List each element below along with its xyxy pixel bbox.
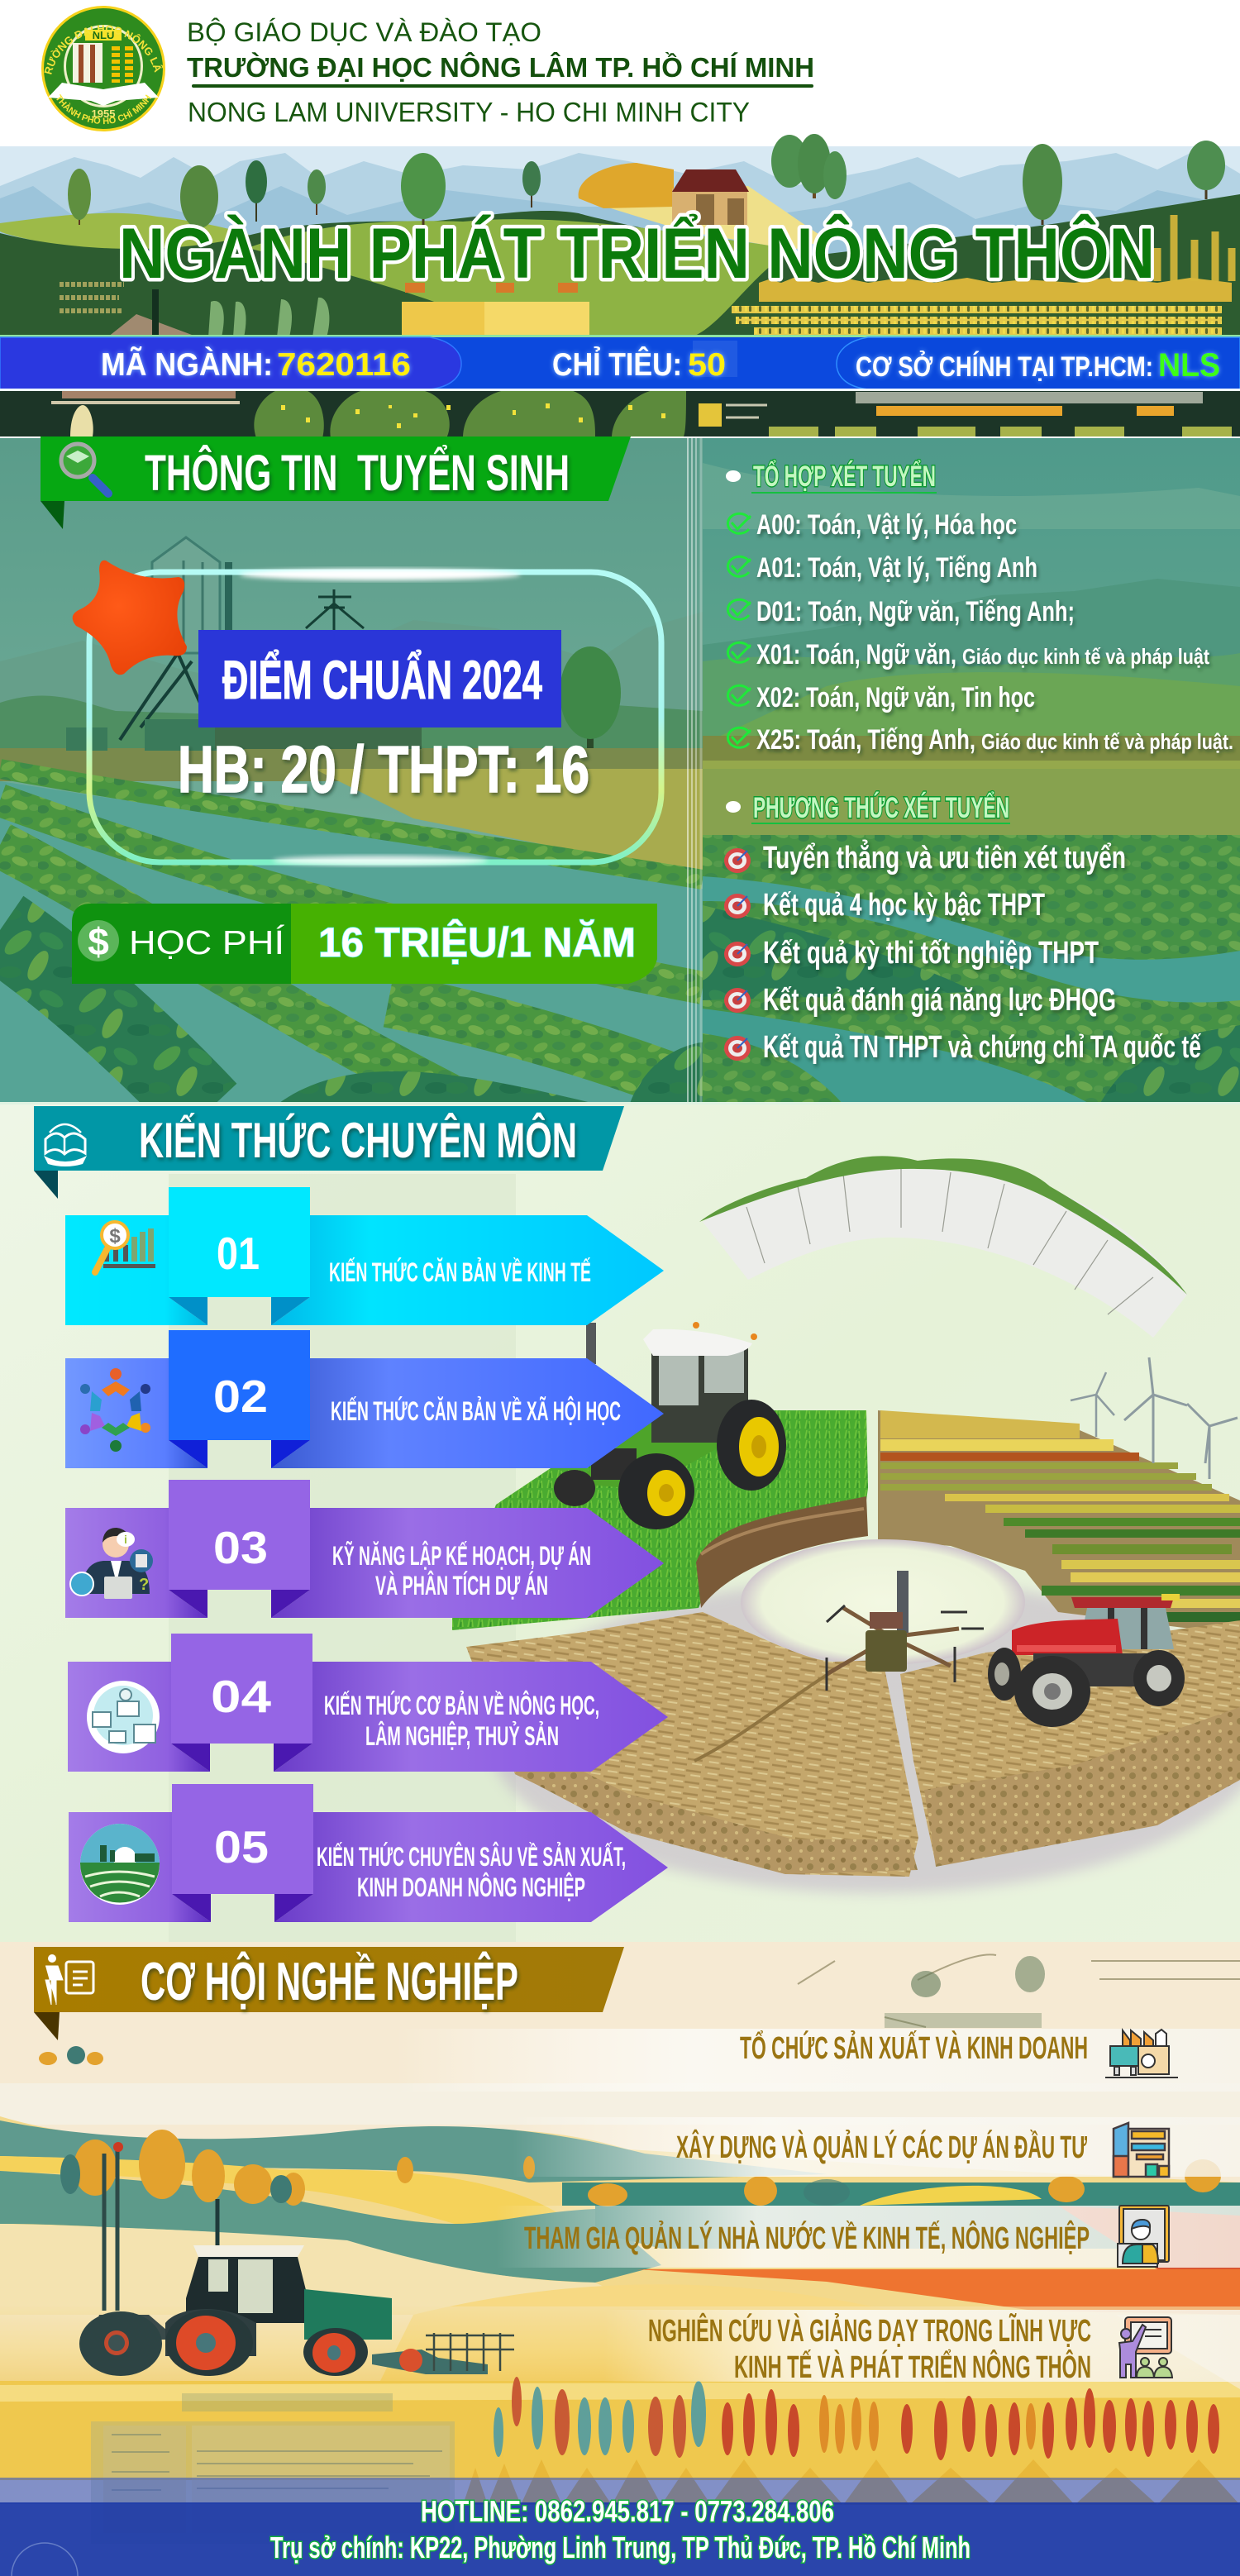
icon: dollar: $ (88, 920, 109, 963)
method 3 (724, 936, 1099, 971)
icon: presenter (45, 1954, 93, 2005)
ribbon text: campus: NLS (1158, 347, 1220, 384)
method 2 (724, 888, 1045, 923)
ribbon text: major code (101, 346, 411, 383)
icon: teacher (1119, 2317, 1172, 2378)
heading: admission information (41, 436, 631, 529)
header line: university name: TRƯỜNG ĐẠI HỌC NÔNG LÂM TP. HỒ CHÍ MINH (187, 51, 814, 83)
small left house (107, 314, 198, 337)
item X01: X01: Toán, Ngữ văn, (756, 639, 956, 670)
corn stalks (759, 278, 1232, 302)
banner trees (68, 134, 1225, 228)
heading: admission information: THÔNG TIN TUYỂN SINH (145, 445, 570, 501)
tractor illustration (79, 2142, 514, 2376)
tuition bar (72, 904, 657, 984)
power pole (306, 589, 364, 630)
career row 4 (603, 2310, 1240, 2385)
wheat stalks (722, 2388, 1219, 2460)
house (672, 188, 747, 225)
right landscape background (703, 438, 1240, 1104)
tuition bar: 16 TRIỆU/1 NĂM (318, 919, 636, 966)
career row 2 (513, 2117, 1240, 2177)
tuition bar: HỌC PHÍ (129, 923, 285, 961)
grass spikes (463, 2459, 1240, 2505)
method 1 (724, 838, 1126, 875)
faded data panel (91, 2393, 455, 2544)
item A00: A00: Toán, Vật lý, Hóa học (756, 509, 1017, 541)
icon: dollar (78, 920, 119, 963)
ribbon text: quota: CHỈ TIÊU: (552, 346, 682, 383)
left landscape background (0, 438, 711, 1112)
icon: finance chart (95, 1222, 155, 1272)
red tractor (988, 1594, 1185, 1727)
landscape background (0, 1942, 1240, 2576)
item A00 (727, 509, 1017, 541)
ribbon text: major code: MÃ NGÀNH: (101, 346, 273, 383)
arrow row 01: KIẾN THỨC CĂN BẢN VỀ KINH TẾ (329, 1257, 591, 1287)
panel: career opportunities (0, 1942, 1240, 2576)
arrow row 02: KIẾN THỨC CĂN BẢN VỀ XÃ HỘI HỌC (331, 1396, 621, 1426)
icon: business planner: i (124, 1533, 127, 1546)
icon: official portrait (1118, 2206, 1169, 2267)
lower dark strip (0, 390, 1240, 436)
icon: university logo: 1955 (92, 107, 115, 120)
icon: university logo: NLU (93, 29, 114, 41)
hotline: HOTLINE: 0862.945.817 - 0773.284.806 (421, 2494, 834, 2528)
brown field quadrant (466, 1612, 918, 1877)
panel: school header (41, 6, 814, 131)
icon: magnifier (61, 444, 108, 494)
central hole (741, 1539, 1025, 1665)
item D01: D01: Toán, Ngữ văn, Tiếng Anh; (756, 596, 1075, 627)
arrow row 01 (65, 1187, 664, 1325)
arrow row 04: KIẾN THỨC CƠ BẢN VỀ NÔNG HỌC, (324, 1691, 599, 1720)
item X01 (727, 639, 1209, 670)
career row 3 (496, 2206, 1240, 2268)
icon: business planner (70, 1528, 153, 1599)
arrow row 05: KINH DOANH NÔNG NGHIỆP (357, 1872, 585, 1902)
item X02 (727, 682, 1035, 713)
faint map drawing (798, 1954, 1240, 2027)
subheading: methods (726, 791, 1010, 824)
vertical divider stripes (688, 438, 701, 1104)
arrow row 05 (69, 1784, 668, 1922)
list: subject combinations (726, 460, 1233, 756)
subheading: methods: PHƯƠNG THỨC XÉT TUYỂN (753, 791, 1009, 824)
ribbon text: quota: 50 (688, 347, 726, 383)
address: Trụ sở chính: KP22, Phường Linh Trung, TP Thủ Đức, TP. Hồ Chí Minh (270, 2531, 971, 2564)
item A01 (727, 552, 1037, 584)
orange trees (39, 2052, 1221, 2206)
panel: admission information (0, 436, 1240, 1112)
green tractor (554, 1322, 786, 1529)
cows (405, 283, 578, 293)
arrow row 04: LÂM NGHIỆP, THUỶ SẢN (365, 1721, 559, 1751)
illustration: circular farm (452, 1156, 1240, 1893)
panel: title banner (0, 134, 1240, 438)
icon: open book (44, 1124, 87, 1166)
heading: career opportunities: CƠ HỘI NGHỀ NGHIỆP (141, 1951, 518, 2011)
stone arch (699, 1156, 1187, 1338)
green field quadrant (452, 1410, 868, 1630)
icon: business planner: ? (139, 1576, 149, 1594)
method 3: Kết quả kỳ thi tốt nghiệp THPT (763, 936, 1099, 971)
panel: professional knowledge (0, 1102, 1240, 1943)
career row 1 (395, 2029, 1240, 2092)
icon: orange star (73, 561, 187, 675)
item X25: X25: Toán, Tiếng Anh, (756, 724, 975, 756)
benchmark label: ĐIỂM CHUẨN 2024 (222, 649, 542, 710)
arrow row 02: 02 (213, 1371, 268, 1422)
benchmark label (198, 630, 561, 727)
icon: university logo: THÀNH PHỐ HỒ CHÍ MINH (56, 94, 151, 124)
method 2: Kết quả 4 học kỳ bậc THPT (763, 888, 1045, 923)
glow frame: benchmark score (73, 561, 661, 866)
list: admission methods (724, 791, 1202, 1065)
header line: ministry: BỘ GIÁO DỤC VÀ ĐÀO TẠO (187, 17, 541, 47)
panel: footer contact (0, 2478, 1240, 2576)
arrow row 03: VÀ PHÂN TÍCH DỰ ÁN (375, 1571, 548, 1600)
method 4 (724, 983, 1116, 1018)
heading: professional knowledge (34, 1106, 624, 1199)
crop field quadrant (878, 1410, 1240, 1645)
item A01: A01: Toán, Vật lý, Tiếng Anh (756, 552, 1037, 584)
icon: factory (1105, 2030, 1178, 2077)
silo tower (66, 537, 244, 751)
straw field quadrant (900, 1620, 1240, 1867)
arrow row 04 (68, 1634, 668, 1772)
arrow row 01: 01 (217, 1228, 260, 1279)
heading: professional knowledge: KIẾN THỨC CHUYÊN MÔN (139, 1113, 577, 1168)
arrow row 03: 03 (213, 1522, 268, 1573)
icon: farming circle (87, 1681, 160, 1753)
icon: farm badge (80, 1824, 160, 1905)
arrow row 05: KIẾN THỨC CHUYÊN SÂU VỀ SẢN XUẤT, (317, 1842, 626, 1872)
arrow row 05: 05 (214, 1821, 269, 1872)
garbled signage (60, 284, 124, 311)
banner background landscape (0, 149, 1240, 438)
wind turbines (1071, 1357, 1238, 1479)
arrow row 04: 04 (211, 1671, 271, 1722)
ribbon text: major code: 7620116 (277, 347, 411, 383)
item X25 (727, 724, 1233, 756)
ribbon text: campus: CƠ SỞ CHÍNH TẠI TP.HCM: (856, 351, 1153, 383)
benchmark scores: HB: 20 / THPT: 16 (178, 732, 589, 806)
arrow row 02 (65, 1330, 664, 1468)
method 1: Tuyển thẳng và ưu tiên xét tuyển (763, 838, 1126, 875)
icon: shelves (1114, 2123, 1169, 2177)
drone (827, 1571, 984, 1691)
icon: university logo (41, 6, 165, 131)
header line: english name: NONG LAM UNIVERSITY - HO CHI MINH CITY (188, 97, 750, 127)
item X02: X02: Toán, Ngữ văn, Tin học (756, 682, 1035, 713)
heading: career opportunities (34, 1947, 624, 2040)
arrow row 03 (65, 1480, 664, 1618)
icon: people circle (80, 1368, 150, 1452)
tree (560, 646, 621, 748)
info ribbon (0, 335, 1240, 391)
subheading: combinations (726, 460, 937, 494)
icon: finance chart: $ (109, 1225, 121, 1247)
crop stripes (732, 306, 1222, 313)
arrow row 03: KỸ NĂNG LẬP KẾ HOẠCH, DỰ ÁN (332, 1541, 591, 1571)
subheading: combinations: TỔ HỢP XÉT TUYỂN (753, 460, 936, 493)
